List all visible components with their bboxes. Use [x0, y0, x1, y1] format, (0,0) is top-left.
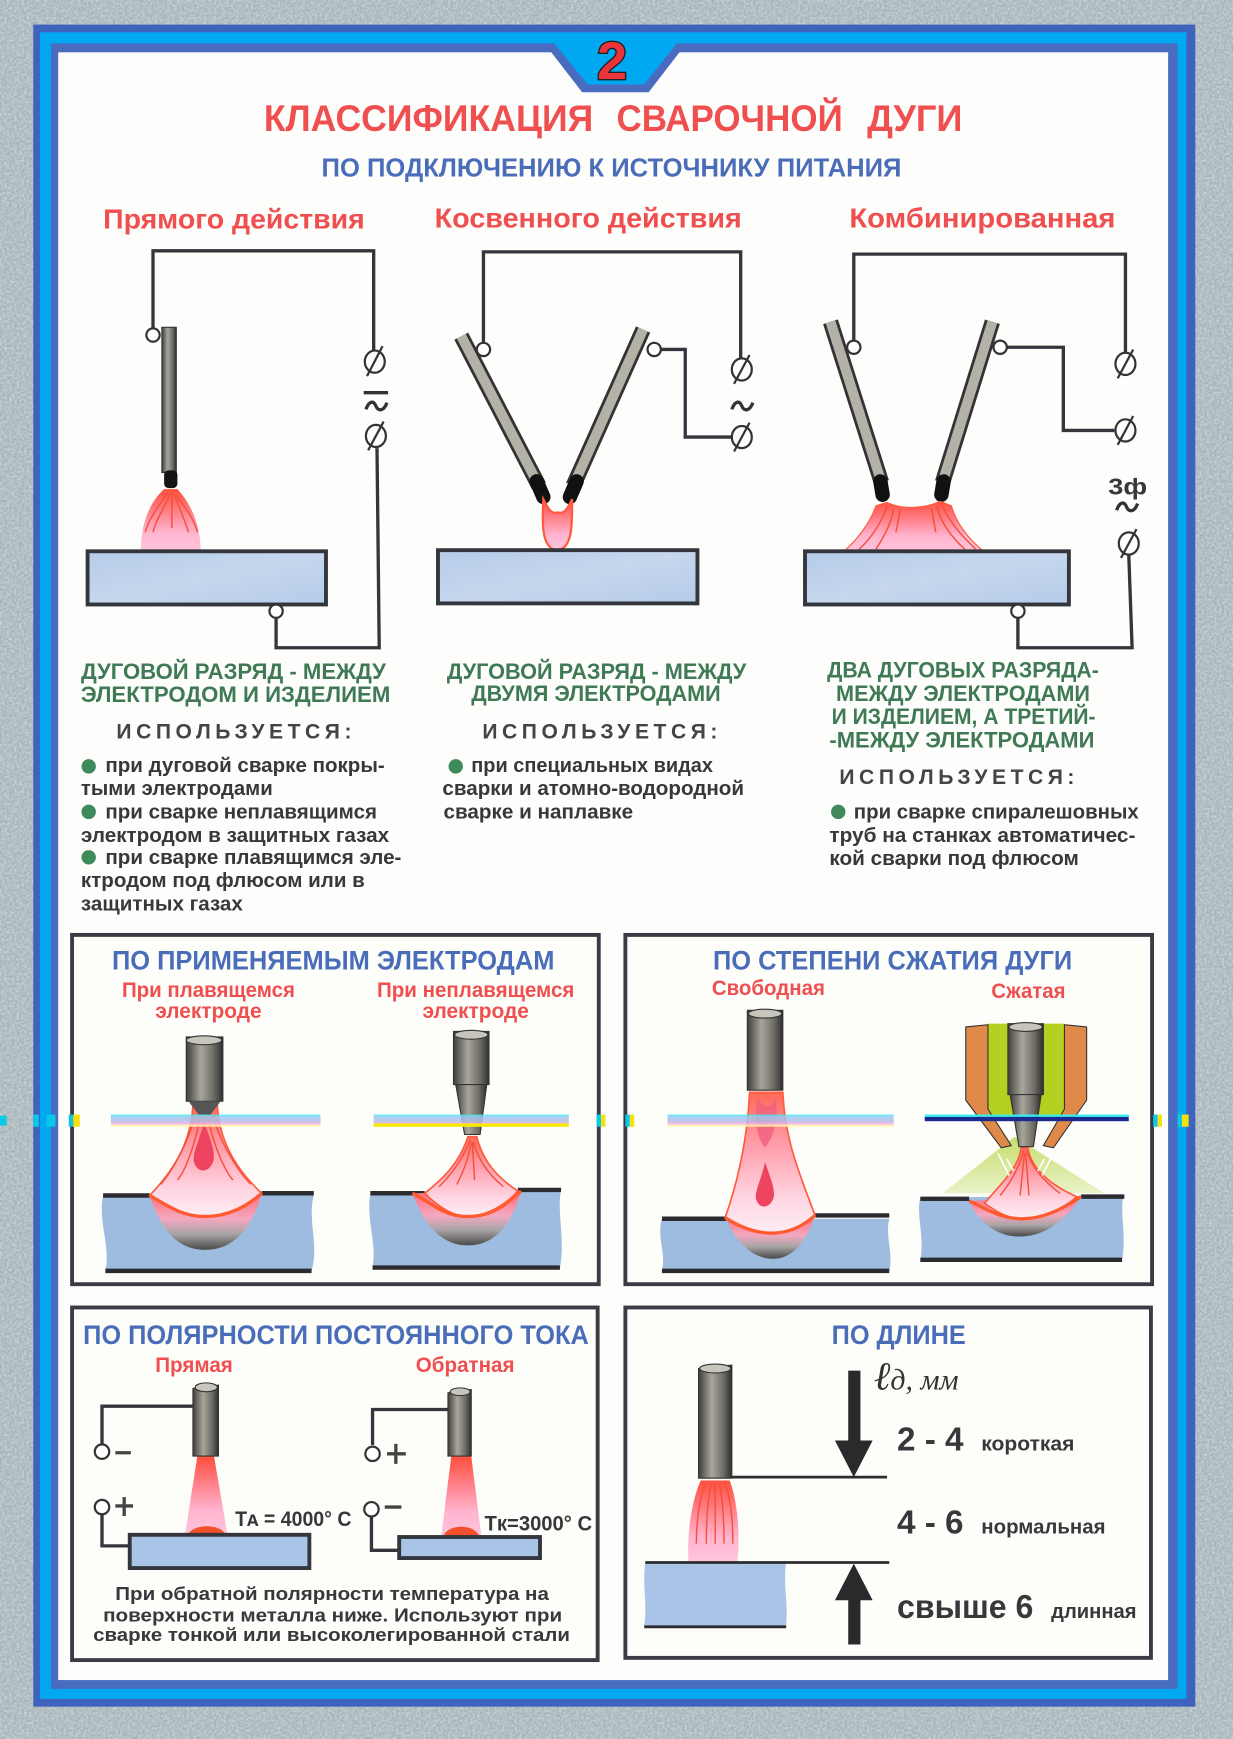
free arc label: Свободная	[712, 977, 825, 1000]
panel: by electrode type	[72, 935, 599, 1284]
title: КЛАССИФИКАЦИЯ	[264, 98, 593, 139]
column 3 description: кой сварки под флюсом	[829, 848, 1079, 870]
normal length: 4 - 6	[897, 1505, 964, 1542]
polarity note: поверхности металла ниже. Используют при	[103, 1604, 562, 1625]
melting electrode label: электроде	[155, 1000, 262, 1023]
subtitle: ПО ПОДКЛЮЧЕНИЮ К ИСТОЧНИКУ ПИТАНИЯ	[322, 154, 901, 182]
column 2 description	[442, 659, 746, 823]
column 3 description	[827, 658, 1139, 870]
figure: compressed arc	[919, 1023, 1124, 1260]
figure: melting electrode arc	[102, 1036, 314, 1271]
short length: 2 - 4	[897, 1422, 964, 1459]
column 3 description: МЕЖДУ ЭЛЕКТРОДАМИ	[836, 681, 1090, 706]
column headings: Прямого действия	[103, 204, 365, 235]
column 1 description: ИСПОЛЬЗУЕТСЯ:	[116, 721, 351, 744]
figure: non-melting electrode arc	[369, 1030, 562, 1268]
column 1 description: ЭЛЕКТРОДОМ И ИЗДЕЛИЕМ	[81, 682, 390, 707]
non-melting electrode label	[377, 979, 574, 1023]
column headings: Комбинированная	[849, 202, 1115, 233]
polarity note: сварке тонкой или высоколегированной стали	[93, 1624, 570, 1645]
diagram: indirect arc	[438, 252, 753, 603]
arrow down	[835, 1371, 873, 1477]
title	[264, 97, 962, 139]
column 1 description	[81, 659, 401, 916]
column headings: Косвенного действия	[435, 202, 742, 233]
column 3 description: ИСПОЛЬЗУЕТСЯ:	[839, 766, 1074, 789]
column 2 description: сварки и атомно-водородной	[442, 778, 744, 800]
long length	[897, 1589, 1137, 1626]
long length: длинная	[1051, 1601, 1137, 1623]
column 1 description: ктродом под флюсом или в	[81, 870, 365, 892]
melting electrode label	[122, 979, 295, 1023]
column 1 description: при дуговой сварке покры-	[105, 755, 385, 777]
column 2 description: сварке и наплавке	[444, 801, 633, 823]
panel heading: length: ПО ДЛИНЕ	[832, 1320, 966, 1350]
panel: arc length	[625, 1307, 1151, 1658]
panel: DC polarity	[72, 1307, 598, 1660]
compressed arc label: Сжатая	[991, 980, 1066, 1003]
column 1 description: при сварке неплавящимся	[105, 801, 377, 823]
diagram: combined arc	[805, 254, 1147, 648]
polarity note: При обратной полярности температура на	[115, 1583, 549, 1604]
column 3 description: труб на станках автоматичес-	[829, 825, 1135, 847]
melting electrode label: При плавящемся	[122, 979, 295, 1002]
scan glitch band	[0, 1115, 1189, 1127]
figure: reverse polarity: Tк=3000° C	[485, 1512, 592, 1535]
column 3 description: И ИЗДЕЛИЕМ, А ТРЕТИЙ-	[832, 704, 1096, 729]
length symbol: ℓд, мм	[874, 1354, 959, 1399]
figure: straight polarity	[95, 1383, 351, 1568]
column headings	[103, 202, 1115, 235]
polarity note	[93, 1583, 570, 1645]
column 1 description: при сварке плавящимся эле-	[105, 847, 401, 869]
diagram: direct arc	[88, 251, 388, 648]
long length: свыше 6	[897, 1589, 1033, 1626]
panel heading: compression: ПО СТЕПЕНИ СЖАТИЯ ДУГИ	[713, 945, 1072, 975]
straight polarity label: Прямая	[155, 1354, 233, 1377]
figure: straight polarity: Tᴀ = 4000° C	[235, 1508, 351, 1531]
figure: reverse polarity	[364, 1388, 592, 1558]
column 1 description: ДУГОВОЙ РАЗРЯД - МЕЖДУ	[81, 659, 386, 684]
column 3 description: -МЕЖДУ ЭЛЕКТРОДАМИ	[829, 728, 1094, 753]
column 2 description: при специальных видах	[471, 755, 713, 777]
column 1 description: электродом в защитных газах	[81, 825, 389, 847]
column 2 description: ИСПОЛЬЗУЕТСЯ:	[482, 721, 717, 744]
column 2 description: ДВУМЯ ЭЛЕКТРОДАМИ	[471, 681, 721, 706]
panel heading: electrodes: ПО ПРИМЕНЯЕМЫМ ЭЛЕКТРОДАМ	[112, 945, 554, 975]
column 3 description: ДВА ДУГОВЫХ РАЗРЯДА-	[827, 658, 1099, 683]
column 1 description: тыми электродами	[81, 778, 273, 800]
diagram: combined arc: 3ф	[1108, 474, 1147, 500]
arrow up	[835, 1564, 873, 1645]
non-melting electrode label: электроде	[422, 1000, 529, 1023]
badge number 2: 2	[597, 32, 627, 91]
title: ДУГИ	[867, 98, 962, 139]
column 3 description: при сварке спиралешовных	[854, 801, 1139, 823]
non-melting electrode label: При неплавящемся	[377, 979, 574, 1002]
figure: electrode and arc gap	[644, 1364, 889, 1627]
column 1 description: защитных газах	[81, 894, 243, 916]
normal length: нормальная	[981, 1517, 1105, 1539]
column 2 description: ДУГОВОЙ РАЗРЯД - МЕЖДУ	[447, 659, 746, 684]
short length: короткая	[981, 1434, 1074, 1456]
reverse polarity label: Обратная	[416, 1354, 514, 1377]
normal length	[897, 1505, 1105, 1542]
short length	[897, 1422, 1074, 1459]
title: СВАРОЧНОЙ	[616, 97, 843, 139]
panel: arc compression	[625, 935, 1152, 1284]
figure: free arc	[660, 1009, 891, 1271]
panel heading: polarity: ПО ПОЛЯРНОСТИ ПОСТОЯННОГО ТОКА	[83, 1320, 589, 1350]
